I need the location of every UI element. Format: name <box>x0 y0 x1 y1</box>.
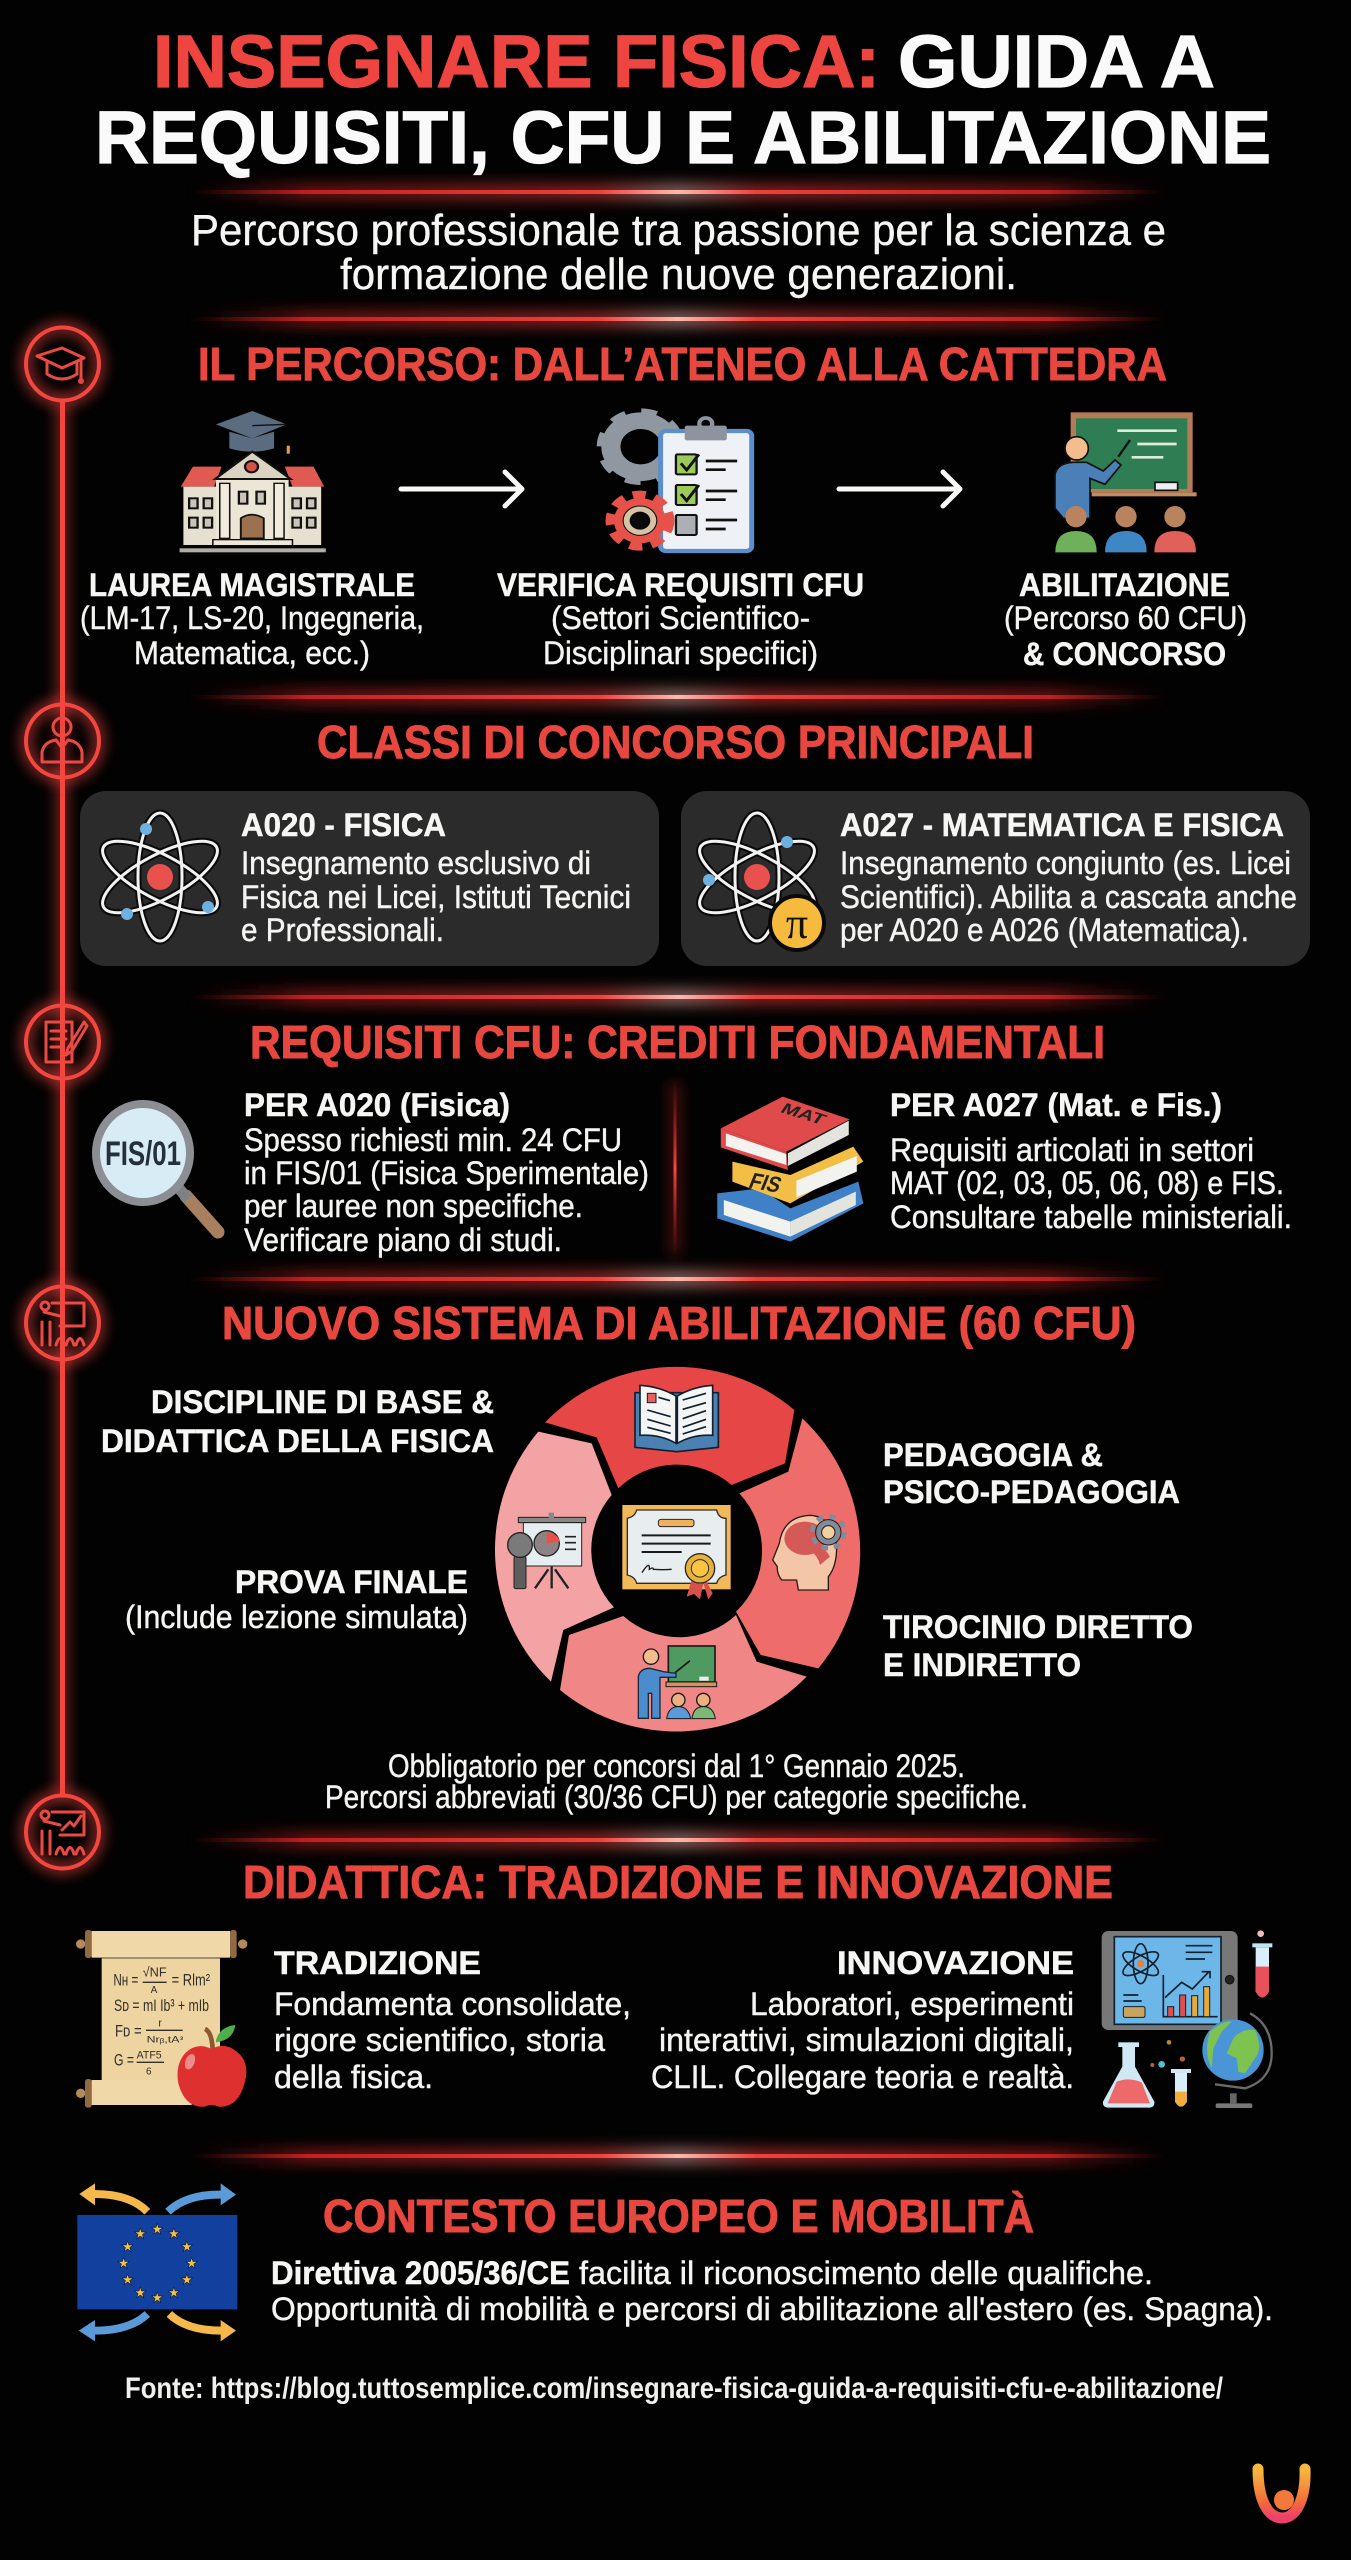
section heading: nuovo sistema: NUOVO SISTEMA DI ABILITAZIONE (60 CFU) <box>222 1297 1136 1349</box>
timeline node: graduation cap <box>26 328 99 400</box>
step: laurea magistrale: LAUREA MAGISTRALE <box>89 567 415 603</box>
step: verifica requisiti: Disciplinari specifici) <box>543 635 818 671</box>
segment: pedagogia <box>736 1418 860 1668</box>
text block: per A027: Consultare tabelle ministeriali. <box>890 1199 1292 1235</box>
icon: certificate <box>622 1505 731 1599</box>
icon: scroll and apple: √NF <box>143 1965 167 1980</box>
icon: EU flag with arrows: ★ <box>180 2239 194 2255</box>
step: abilitazione: & CONCORSO <box>1023 636 1226 672</box>
icon: teaching scene <box>638 1646 717 1719</box>
segment: tirocinio <box>560 1615 807 1731</box>
icon: scroll and apple: Nн = <box>113 1971 138 1990</box>
text block: tradizione: rigore scientifico, storia <box>274 2022 605 2058</box>
text block: per A020: Spesso richiesti min. 24 CFU <box>244 1122 622 1158</box>
text block: tradizione: TRADIZIONE <box>274 1945 481 1981</box>
icon: scroll and apple: 6 <box>146 2066 152 2077</box>
icon: scroll and apple: Sᴅ = mI Ib³ + mIb <box>114 1996 209 2015</box>
icon: EU flag with arrows: ★ <box>151 2290 164 2306</box>
labels right of wheel: TIROCINIO DIRETTO <box>883 1609 1193 1645</box>
section heading: classi di concorso: CLASSI DI CONCORSO PRINCIPALI <box>317 716 1034 768</box>
text block: innovazione: interattivi, simulazioni digitali, <box>659 2022 1074 2058</box>
text block: per A027: MAT (02, 03, 05, 06, 08) e FIS. <box>890 1165 1284 1201</box>
icon: checklist and gears <box>601 412 752 551</box>
panel: A027: per A020 e A026 (Matematica). <box>840 912 1249 948</box>
icon: stack of books: MAT <box>777 1100 830 1128</box>
labels left of wheel: PROVA FINALE <box>235 1564 468 1600</box>
panel: A020: e Professionali. <box>241 912 444 948</box>
icon: EU flag with arrows: ★ <box>167 2227 181 2243</box>
logo <box>1258 2469 1305 2518</box>
icon: EU flag with arrows: ★ <box>121 2273 134 2289</box>
note: obbligatorio <box>325 1748 1028 1815</box>
text block: per A027: Requisiti articolati in settori <box>890 1132 1254 1168</box>
title: GUIDA A <box>898 20 1215 103</box>
panel: A020 <box>80 791 659 966</box>
text block: per A027 <box>890 1087 1292 1235</box>
panel: A027: Scientifici). Abilita a cascata anche <box>840 879 1297 915</box>
text block: per A020 <box>244 1087 649 1258</box>
title: INSEGNARE FISICA: <box>153 20 880 103</box>
labels right of wheel: PSICO-PEDAGOGIA <box>883 1474 1180 1510</box>
step: laurea magistrale: (LM-17, LS-20, Ingegneria, <box>80 600 424 636</box>
step: laurea magistrale <box>80 567 424 671</box>
section heading: requisiti cfu: REQUISITI CFU: CREDITI FONDAMENTALI <box>250 1016 1105 1068</box>
step: verifica requisiti: (Settori Scientifico- <box>551 600 810 636</box>
icon: EU flag with arrows: ★ <box>134 2227 147 2243</box>
text block: direttiva: facilita il riconoscimento delle qualifiche. <box>579 2255 1153 2291</box>
text block: direttiva: Direttiva 2005/36/CE <box>271 2255 570 2291</box>
icon: EU flag with arrows: ★ <box>134 2286 147 2302</box>
text block: direttiva: Opportunità di mobilità e percorsi di abilitazione all'estero (es. Spagna). <box>271 2291 1273 2327</box>
title <box>95 20 1271 179</box>
text block: direttiva <box>271 2255 1273 2327</box>
icon: head with gear <box>773 1515 844 1590</box>
segment: discipline di base <box>545 1367 794 1488</box>
icon: scroll and apple: Nrᵦ,tAᵌ <box>147 2034 183 2044</box>
panel: A020: Fisica nei Licei, Istituti Tecnici <box>241 879 631 915</box>
text block: innovazione: Laboratori, esperimenti <box>750 1986 1074 2022</box>
text block: per A020: Verificare piano di studi. <box>244 1222 562 1258</box>
timeline line <box>57 400 67 1796</box>
icon: stack of books: FIS <box>746 1168 786 1197</box>
icon: EU flag with arrows: ★ <box>185 2256 198 2272</box>
icon: tablet, flasks and globe <box>1102 1930 1272 2108</box>
labels right of wheel: E INDIRETTO <box>883 1647 1081 1683</box>
timeline node: teacher <box>26 704 99 778</box>
arrow <box>401 472 522 506</box>
text block: per A027: PER A027 (Mat. e Fis.) <box>890 1087 1222 1123</box>
text block: tradizione: Fondamenta consolidate, <box>274 1986 631 2022</box>
text block: innovazione: CLIL. Collegare teoria e realtà. <box>651 2059 1074 2095</box>
icon: EU flag with arrows: ★ <box>180 2273 194 2289</box>
text block: tradizione: della fisica. <box>274 2059 433 2095</box>
text block: innovazione <box>651 1945 1074 2095</box>
section heading: contesto europeo: CONTESTO EUROPEO E MOBILITÀ <box>323 2190 1034 2242</box>
icon: magnifier FIS/01: FIS/01 <box>105 1135 181 1173</box>
note: obbligatorio: Percorsi abbreviati (30/36 CFU) per categorie specifiche. <box>325 1779 1028 1815</box>
icon: scroll and apple: A <box>151 1985 158 1996</box>
arrow <box>839 472 960 506</box>
icon: university <box>180 411 326 552</box>
icon: atom with pi <box>690 813 824 950</box>
icon: stack of books <box>717 1097 863 1242</box>
subtitle: formazione delle nuove generazioni. <box>340 250 1017 299</box>
labels left of wheel <box>101 1384 494 1635</box>
step: abilitazione <box>1004 567 1247 672</box>
chart: abilitation wheel <box>495 1367 860 1731</box>
icon: presentation and microphone <box>508 1513 586 1589</box>
icon: scroll and apple: = Rlm² <box>172 1971 210 1990</box>
step: verifica requisiti: VERIFICA REQUISITI CFU <box>497 567 864 603</box>
step: laurea magistrale: Matematica, ecc.) <box>134 635 370 671</box>
icon: scroll and apple <box>76 1930 247 2108</box>
icon: EU flag with arrows: ★ <box>167 2286 181 2302</box>
panel: A027 <box>681 791 1310 966</box>
icon: atom <box>93 813 227 941</box>
timeline node: teaching chart <box>26 1796 99 1868</box>
icon: scroll and apple: ATF5 <box>137 2049 162 2061</box>
step: abilitazione: (Percorso 60 CFU) <box>1004 600 1247 636</box>
subtitle: Percorso professionale tra passione per la scienza e <box>191 206 1166 255</box>
panel: A020: A020 - FISICA <box>241 807 446 843</box>
icon: open book <box>635 1385 718 1452</box>
icon: scroll and apple: G = <box>114 2051 134 2070</box>
section heading: didattica: DIDATTICA: TRADIZIONE E INNOVAZIONE <box>243 1856 1113 1908</box>
panel: A027: A027 - MATEMATICA E FISICA <box>840 807 1284 843</box>
text block: per A020: per lauree non specifiche. <box>244 1188 583 1224</box>
section heading: il percorso: IL PERCORSO: DALL’ATENEO ALLA CATTEDRA <box>198 338 1167 390</box>
labels right of wheel <box>883 1437 1193 1683</box>
text block: innovazione: INNOVAZIONE <box>837 1945 1074 1981</box>
icon: EU flag with arrows <box>77 2183 237 2341</box>
text block: tradizione <box>274 1945 631 2095</box>
icon: scroll and apple: Fᴅ = <box>115 2022 142 2041</box>
text block: per A020: in FIS/01 (Fisica Sperimentale) <box>244 1155 649 1191</box>
labels left of wheel: (Include lezione simulata) <box>125 1599 468 1635</box>
icon: magnifier FIS/01 <box>96 1104 218 1232</box>
labels left of wheel: DISCIPLINE DI BASE & <box>151 1384 494 1420</box>
panel: A020: Insegnamento esclusivo di <box>241 845 591 881</box>
icon: teacher at blackboard <box>1055 412 1197 552</box>
icon: EU flag with arrows: ★ <box>117 2256 130 2272</box>
subtitle <box>191 206 1166 299</box>
note: obbligatorio: Obbligatorio per concorsi dal 1° Gennaio 2025. <box>388 1748 965 1784</box>
panel: A027: Insegnamento congiunto (es. Licei <box>840 845 1291 881</box>
timeline node: classroom <box>26 1286 99 1360</box>
text block: per A020: PER A020 (Fisica) <box>244 1087 510 1123</box>
labels left of wheel: DIDATTICA DELLA FISICA <box>101 1423 494 1459</box>
step: abilitazione: ABILITAZIONE <box>1019 567 1230 603</box>
icon: scroll and apple: r <box>158 2018 162 2030</box>
labels right of wheel: PEDAGOGIA & <box>883 1437 1103 1473</box>
icon: EU flag with arrows: ★ <box>121 2239 134 2255</box>
icon: atom with pi: π <box>786 899 808 948</box>
icon: EU flag with arrows: ★ <box>151 2222 164 2238</box>
title: REQUISITI, CFU E ABILITAZIONE <box>95 96 1271 179</box>
step: verifica requisiti <box>497 567 864 671</box>
timeline node: document and pen <box>26 1006 99 1078</box>
segment: prova finale <box>495 1432 614 1682</box>
